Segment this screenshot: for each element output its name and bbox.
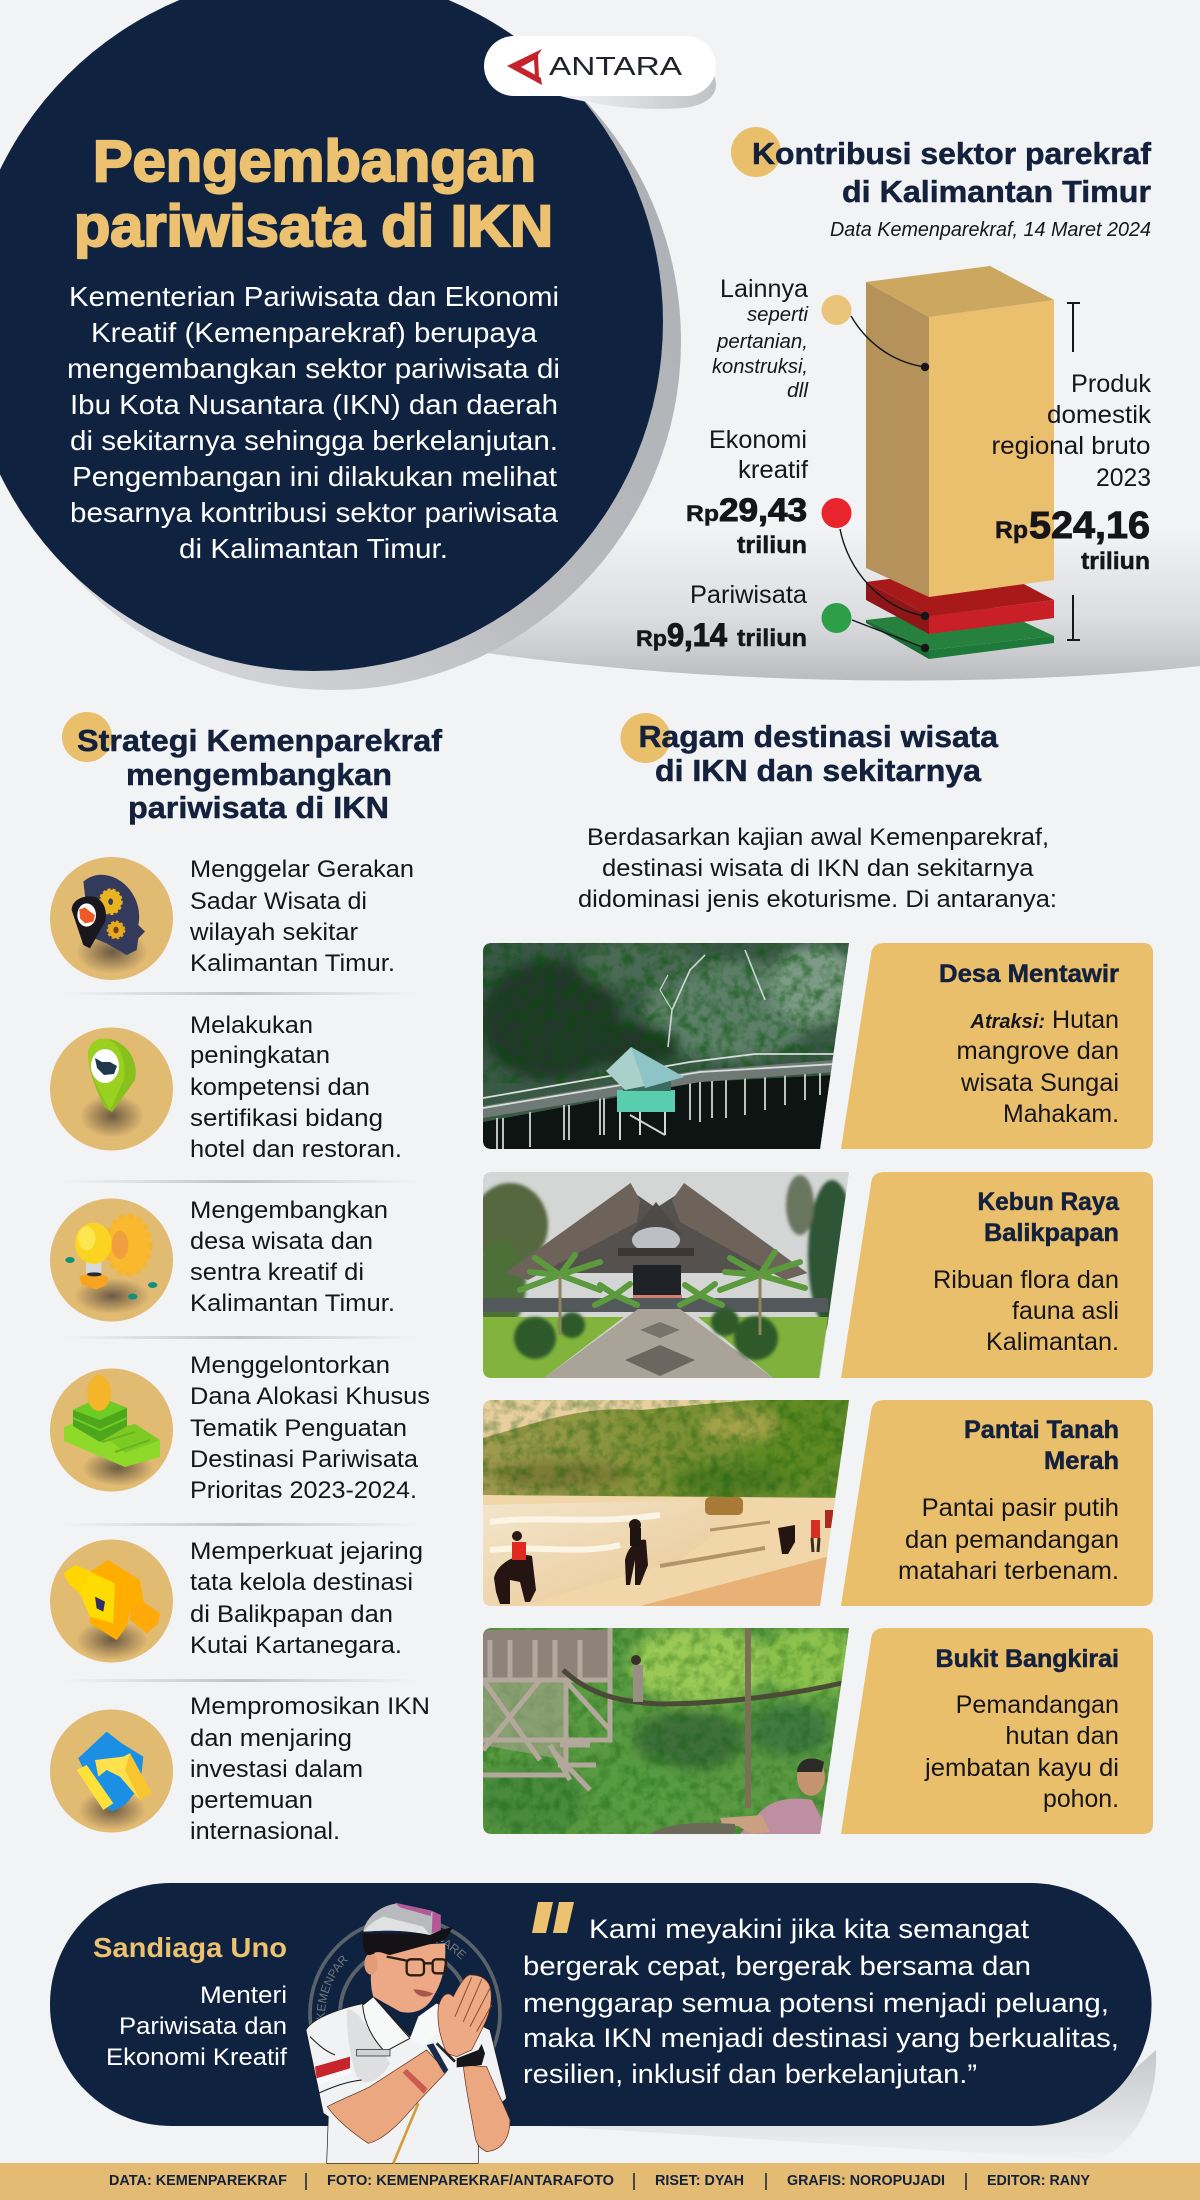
text: strategy 2: sertifikasi bidang	[190, 1105, 383, 1132]
label: lainnya	[712, 275, 809, 402]
card: Pantai Tanah Merah: dan pemandangan	[905, 1526, 1119, 1554]
text: strategy 5: di Balikpapan dan	[190, 1601, 393, 1628]
intro paragraph: besarnya kontribusi sektor pariwisata	[70, 497, 558, 528]
horse riders	[494, 1519, 795, 1604]
card: Pantai Tanah Merah: Pantai Tanah	[964, 1416, 1119, 1444]
label: PDRB total: 2023	[1096, 464, 1151, 492]
label: lainnya: konstruksi,	[712, 356, 808, 378]
speaker role: Pariwisata dan	[119, 2013, 287, 2040]
label: PDRB total: triliun	[1081, 548, 1150, 575]
text: strategy 4: Dana Alokasi Khusus	[190, 1383, 430, 1410]
quote text: menggarap semua potensi menjadi peluang,	[523, 1988, 1109, 2018]
speaker role: Menteri	[200, 1982, 287, 2009]
card: Kebun Raya Balikpapan: Ribuan flora dan	[933, 1266, 1119, 1294]
destinations heading: Ragam destinasi wisata	[638, 719, 999, 754]
text: strategy 2	[190, 1012, 402, 1163]
label: PDRB total: 524,16	[1029, 505, 1150, 547]
heading marker	[62, 712, 112, 762]
emblem: ministry seal	[308, 1923, 502, 2049]
photo: Desa Mentawir	[480, 940, 860, 1149]
text: strategy 6: dan menjaring	[190, 1725, 352, 1752]
shirt	[306, 1997, 507, 2163]
text: strategy 3	[190, 1197, 395, 1317]
intro paragraph	[67, 281, 560, 564]
text: strategy 2: Melakukan	[190, 1012, 313, 1039]
panel: sector contribution	[636, 127, 1152, 659]
text: strategy 3: sentra kreatif di	[190, 1259, 364, 1286]
footer bar: FOTO: KEMENPAREKRAF/ANTARAFOTO	[327, 2173, 614, 2189]
legend dot: pariwisata	[822, 603, 852, 633]
emblem: ministry seal: PARE	[436, 1940, 466, 1960]
label: pariwisata	[636, 581, 807, 653]
text: strategy 2: peningkatan	[190, 1042, 330, 1069]
legend dot: lainnya	[822, 295, 852, 325]
strategy heading	[77, 723, 443, 825]
card: Pantai Tanah Merah: Merah	[1044, 1447, 1119, 1475]
text: strategy 6: investasi dalam	[190, 1756, 363, 1783]
photo: Bukit Bangkirai	[475, 1625, 860, 1835]
label: lainnya: pertanian,	[716, 331, 808, 353]
card: Pantai Tanah Merah: matahari terbenam.	[898, 1557, 1119, 1585]
text: strategy 6: pertemuan	[190, 1787, 313, 1814]
intro paragraph: Ibu Kota Nusantara (IKN) dan daerah	[70, 389, 558, 420]
photo: Pantai Tanah Merah	[483, 1397, 853, 1606]
chart heading: Kontribusi sektor parekraf	[752, 136, 1152, 171]
intro paragraph: Pengembangan ini dilakukan melihat	[72, 461, 557, 492]
card: Kebun Raya Balikpapan	[841, 1172, 1153, 1378]
card: Desa Mentawir: Desa Mentawir	[939, 960, 1119, 988]
icon: antara mark	[507, 49, 542, 85]
panel: destinations	[472, 713, 1153, 1835]
destinations intro: Berdasarkan kajian awal Kemenparekraf,	[587, 824, 1049, 851]
card: Bukit Bangkirai: Bukit Bangkirai	[936, 1645, 1119, 1673]
strategy heading: Strategi Kemenparekraf	[77, 723, 443, 758]
card: Desa Mentawir: wisata Sungai	[960, 1069, 1119, 1097]
label: ekonomi kreatif: kreatif	[738, 456, 808, 484]
destinations intro: destinasi wisata di IKN dan sekitarnya	[602, 855, 1034, 882]
card: Pantai Tanah Merah: Pantai pasir putih	[922, 1494, 1119, 1522]
text: strategy 3: Mengembangkan	[190, 1197, 388, 1224]
destinations heading: di IKN dan sekitarnya	[655, 753, 982, 788]
card: Bukit Bangkirai: hutan dan	[1005, 1722, 1119, 1750]
card: Desa Mentawir: mangrove dan	[956, 1037, 1119, 1065]
text: strategy 2: hotel dan restoran.	[190, 1136, 402, 1163]
panel: strategy	[50, 712, 443, 1845]
title: Pengembangan	[93, 129, 536, 194]
text: strategy 5	[190, 1538, 423, 1659]
heading marker	[620, 713, 670, 763]
title: pariwisata di IKN	[74, 194, 553, 259]
text: strategy 4	[190, 1352, 430, 1504]
quote text: bergerak cepat, bergerak bersama dan	[523, 1951, 1031, 1981]
illustration: Sandiaga Uno with emblem	[306, 1902, 510, 2164]
text: strategy 6: Mempromosikan IKN	[190, 1693, 430, 1720]
strategy heading: mengembangkan	[126, 757, 392, 792]
emblem: ministry seal: KEMENPAR	[316, 1956, 348, 2019]
text: strategy 6: internasional.	[190, 1818, 340, 1845]
source note: Data Kemenparekraf, 14 Maret 2024	[830, 219, 1151, 241]
label: ekonomi kreatif: Ekonomi	[709, 426, 807, 454]
text: strategy 4: Prioritas 2023-2024.	[190, 1477, 417, 1504]
logo wordmark: ANTARA	[549, 51, 683, 81]
icon: light bulb and gear	[50, 1198, 173, 1322]
card: Desa Mentawir: Hutan	[1052, 1006, 1119, 1034]
card: Bukit Bangkirai: Pemandangan	[956, 1691, 1119, 1719]
text: strategy 4: Menggelontorkan	[190, 1352, 390, 1379]
quote text	[523, 1914, 1119, 2089]
heading marker	[731, 127, 781, 177]
photo: Kebun Raya Balikpapan	[472, 1172, 856, 1378]
background swoosh under header	[440, 530, 1200, 681]
flag armband	[315, 2057, 350, 2078]
label: PDRB total	[992, 370, 1152, 575]
label: pariwisata: Pariwisata	[690, 581, 807, 609]
label: pariwisata: triliun	[737, 625, 807, 652]
card: Kebun Raya Balikpapan: Kebun Raya	[978, 1188, 1120, 1216]
label: lainnya: seperti	[747, 304, 809, 326]
label: ekonomi kreatif: 29,43	[719, 492, 807, 528]
text: strategy 1: wilayah sekitar	[189, 919, 358, 946]
legend dot: ekonomi kreatif	[822, 498, 852, 528]
intro paragraph: Kementerian Pariwisata dan Ekonomi	[69, 281, 559, 312]
label: PDRB total: Rp	[995, 517, 1028, 544]
header circle panel	[0, 0, 681, 690]
stick	[393, 2103, 418, 2163]
intro paragraph: di Kalimantan Timur.	[179, 533, 448, 564]
intro paragraph: di sekitarnya sehingga berkelanjutan.	[70, 425, 558, 456]
intro paragraph: Kreatif (Kemenparekraf) berupaya	[91, 317, 537, 348]
label: lainnya: Lainnya	[720, 275, 808, 303]
card: Kebun Raya Balikpapan: Balikpapan	[984, 1219, 1119, 1247]
text: strategy 1: Menggelar Gerakan	[190, 856, 414, 883]
chart heading: di Kalimantan Timur	[842, 174, 1151, 209]
label: PDRB total: domestik	[1047, 401, 1152, 429]
chart heading	[752, 136, 1152, 209]
hands	[438, 1975, 492, 2057]
panel: quote banner	[50, 1883, 1156, 2159]
card: Desa Mentawir	[841, 943, 1153, 1149]
speaker role	[106, 1982, 287, 2071]
quote text: maka IKN menjadi destinasi yang berkualitas,	[523, 2023, 1119, 2053]
icon: blue and yellow handshake	[50, 1710, 173, 1832]
card: Bukit Bangkirai: jembatan kayu di	[924, 1754, 1119, 1782]
footer bar: RISET: DYAH	[655, 2173, 744, 2189]
icon: money stack and coin	[50, 1368, 173, 1492]
footer bar: DATA: KEMENPAREKRAF	[109, 2173, 287, 2189]
card: Desa Mentawir: Atraksi:	[969, 1011, 1045, 1033]
label: ekonomi kreatif: triliun	[737, 532, 807, 559]
text: strategy 5: Memperkuat jejaring	[190, 1538, 423, 1565]
text: strategy 4: Destinasi Pariwisata	[190, 1446, 419, 1473]
text: strategy 1	[189, 856, 414, 977]
icon: green location pin	[50, 1028, 173, 1150]
text: strategy 2: kompetensi dan	[190, 1074, 370, 1101]
footer bar: GRAFIS: NOROPUJADI	[787, 2173, 945, 2189]
label: PDRB total: Produk	[1071, 370, 1151, 398]
text: strategy 1: Kalimantan Timur.	[190, 950, 395, 977]
card: Desa Mentawir: Mahakam.	[1003, 1100, 1119, 1128]
connectors	[840, 316, 928, 652]
stacked 3D bar chart	[866, 266, 1054, 659]
card: Bukit Bangkirai	[841, 1628, 1153, 1834]
glasses	[387, 1957, 446, 1975]
hair	[362, 1927, 453, 1955]
text: strategy 4: Tematik Penguatan	[190, 1415, 407, 1442]
quotation mark	[532, 1902, 574, 1933]
speaker name: Sandiaga Uno	[93, 1932, 287, 1963]
icon: head with gears and pin	[50, 857, 173, 980]
label: ekonomi kreatif: Rp	[686, 501, 719, 526]
left forearm	[327, 2050, 447, 2143]
icon: orange hand shape	[50, 1540, 173, 1662]
card: Pantai Tanah Merah	[841, 1400, 1153, 1606]
logo pill	[484, 36, 716, 109]
text: strategy 3: Kalimantan Timur.	[190, 1290, 395, 1317]
text: strategy 5: tata kelola destinasi	[190, 1569, 413, 1596]
label: pariwisata: 9,14	[667, 617, 727, 653]
label: lainnya: dll	[787, 380, 809, 402]
watch and bracelets	[457, 2044, 485, 2067]
speaker role: Ekonomi Kreatif	[106, 2044, 287, 2071]
destinations intro: didominasi jenis ekoturisme. Di antaranya:	[578, 886, 1057, 913]
text: strategy 3: desa wisata dan	[190, 1228, 373, 1255]
intro paragraph: mengembangkan sektor pariwisata di	[67, 353, 560, 384]
quote text: Kami meyakini jika kita semangat	[589, 1914, 1030, 1944]
udeng headwear	[363, 1903, 441, 1935]
brackets	[1067, 303, 1080, 640]
right forearm	[463, 2065, 510, 2152]
face	[371, 1943, 445, 2013]
title	[74, 129, 553, 259]
label: ekonomi kreatif	[686, 426, 808, 559]
destinations intro	[578, 824, 1057, 913]
text: strategy 5: Kutai Kartanegara.	[190, 1632, 402, 1659]
card: Kebun Raya Balikpapan: Kalimantan.	[986, 1328, 1119, 1356]
text: strategy 1: Sadar Wisata di	[190, 888, 367, 915]
card: Kebun Raya Balikpapan: fauna asli	[1012, 1297, 1119, 1325]
destinations heading	[638, 719, 999, 788]
text: strategy 6	[190, 1693, 430, 1845]
footer bar: EDITOR: RANY	[987, 2173, 1090, 2189]
card: Bukit Bangkirai: pohon.	[1043, 1785, 1119, 1813]
quote text: resilien, inklusif dan berkelanjutan.”	[523, 2059, 977, 2089]
label: pariwisata: Rp	[636, 626, 667, 651]
footer bar	[0, 2163, 1200, 2200]
label: PDRB total: regional bruto	[992, 432, 1150, 460]
strategy heading: pariwisata di IKN	[128, 790, 389, 825]
